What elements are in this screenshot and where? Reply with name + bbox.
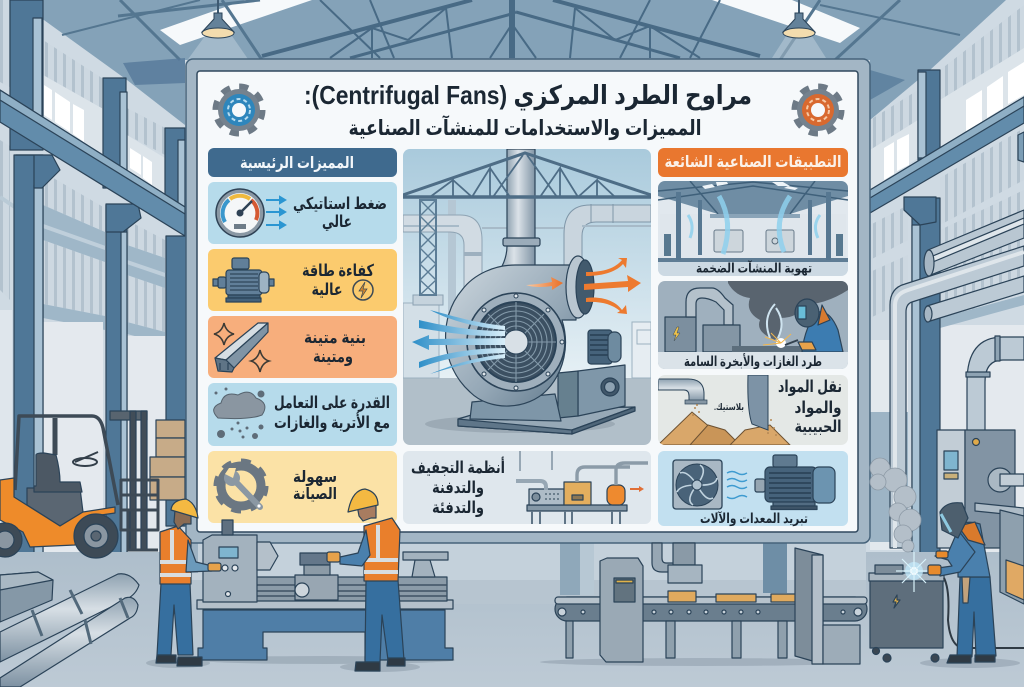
icon: pressure gauge xyxy=(216,189,264,237)
text: high static pressure xyxy=(293,195,387,232)
icon: electric motor xyxy=(755,455,835,510)
inspection machine xyxy=(600,558,643,662)
roof truss xyxy=(262,0,760,58)
legs xyxy=(157,583,193,655)
icon: welding spark xyxy=(896,552,932,592)
card: toxic gas extraction xyxy=(658,281,848,369)
fan base plate xyxy=(458,407,635,434)
lathe headstock xyxy=(203,535,257,602)
text: high energy efficiency xyxy=(302,262,374,299)
exhaust nozzle above conveyor xyxy=(652,543,702,583)
board surface xyxy=(197,71,858,532)
arrows: blue air intake xyxy=(412,310,505,374)
forklift wheels xyxy=(0,523,22,557)
card: high static pressure xyxy=(208,182,397,244)
icon: air swirls xyxy=(688,196,820,254)
ground shadow xyxy=(425,417,615,433)
label: plastic: بلاستيك. xyxy=(714,402,744,412)
caption: تهوية المنشآت الضخمة xyxy=(696,260,812,276)
text: robust structure: ومتينة xyxy=(313,348,353,367)
welding cart xyxy=(869,565,1024,662)
icon: left ceiling lamp xyxy=(186,0,250,62)
lathe machine xyxy=(197,520,453,660)
ceiling xyxy=(37,0,1006,125)
scene: smoke xyxy=(728,281,848,340)
lathe bed xyxy=(250,577,447,601)
card: robust structure xyxy=(208,316,397,378)
icon: axial fan xyxy=(673,460,722,509)
panel: common industrial applications xyxy=(658,148,848,526)
main display board xyxy=(186,59,870,543)
scanning arch xyxy=(795,548,860,664)
heading: key advantages: المميزات الرئيسية xyxy=(240,155,354,172)
board supports under the display xyxy=(188,543,787,595)
card: ease of maintenance xyxy=(208,451,397,523)
right wall bays xyxy=(870,5,1024,555)
card: cooling equipment and machines xyxy=(658,451,848,526)
icon: drying equipment xyxy=(516,451,648,524)
stacked cardboard boxes xyxy=(150,420,185,500)
icon: welder xyxy=(785,299,843,352)
orange vest xyxy=(160,526,191,584)
fan legs xyxy=(470,394,561,421)
arrow: orange inner arrow xyxy=(526,277,563,290)
head xyxy=(174,510,191,529)
smoke plume xyxy=(870,458,921,552)
boots xyxy=(156,655,202,666)
steel stack and pipes xyxy=(0,572,139,687)
conveyor belt xyxy=(555,597,867,658)
caption: تبريد المعدات والآلات xyxy=(700,511,808,526)
panel: drying and heating systems xyxy=(403,451,651,524)
text: high energy efficiency: عالية xyxy=(312,281,342,299)
card: conveying granular materials xyxy=(658,375,848,445)
panel: key advantages xyxy=(208,148,397,523)
forklift body xyxy=(0,478,115,547)
icon: electric motor xyxy=(213,258,274,302)
text: drying and heating systems: والتدفئة xyxy=(432,499,484,518)
icon: title gear right xyxy=(795,87,841,133)
icon: right ceiling lamp xyxy=(772,0,826,58)
conveyor products xyxy=(668,591,809,602)
legs xyxy=(365,580,404,662)
text: drying and heating systems xyxy=(411,457,505,518)
heading: common industrial applications: التطبيقات الصناعية الشائعة xyxy=(664,154,842,171)
forklift xyxy=(0,411,158,558)
lathe carriage xyxy=(295,575,338,600)
title: مراوح الطرد المركزي (Centrifugal Fans): xyxy=(304,80,752,111)
icon: title gear left xyxy=(216,87,262,133)
text: dust and gas handling xyxy=(274,394,390,433)
process machine right xyxy=(937,430,1024,548)
drive motor xyxy=(588,330,621,364)
roof truss xyxy=(403,153,651,197)
forklift mast xyxy=(110,411,147,420)
workbench right xyxy=(975,503,1024,604)
text: dust and gas handling: القدرة على التعامل xyxy=(274,394,390,412)
text: ease of maintenance: الصيانة xyxy=(293,486,337,503)
forklift cab interior xyxy=(27,488,83,526)
orange vest xyxy=(364,518,400,581)
floor shadows xyxy=(146,656,1020,672)
fan volute housing xyxy=(446,265,576,406)
subtitle: المميزات والاستخدامات للمنشآت الصناعية xyxy=(348,115,702,140)
card: ventilation of large facilities xyxy=(658,181,848,276)
card: high energy efficiency xyxy=(208,249,397,311)
lathe stand xyxy=(198,610,453,660)
text: dust and gas handling: مع الأترية والغازات xyxy=(274,412,390,433)
text: drying and heating systems: والتدفنة xyxy=(432,479,484,498)
worker: welder xyxy=(928,503,996,663)
head xyxy=(357,505,376,521)
vertical duct xyxy=(500,149,540,270)
text: conveying granular materials xyxy=(778,378,842,436)
table and sparks xyxy=(732,333,802,352)
text: high energy efficiency: كفاءة طاقة xyxy=(302,262,374,280)
text: drying and heating systems: أنظمة التجفيف xyxy=(411,457,505,477)
board frame xyxy=(186,59,870,543)
background plant and pipes xyxy=(403,200,651,378)
icon: gear and wrench xyxy=(216,461,266,511)
boots xyxy=(355,658,405,671)
icon: air waves xyxy=(727,472,747,498)
arm xyxy=(186,540,212,572)
motor pedestal xyxy=(558,365,625,418)
inlet ring and grille xyxy=(467,293,565,391)
floor xyxy=(0,552,1024,687)
pipes right xyxy=(890,210,1024,548)
icon: sparkle stars xyxy=(214,323,269,372)
forklift cage xyxy=(15,416,118,505)
forklift seat xyxy=(34,453,82,492)
text: high static pressure: ضغط استاتيكي xyxy=(293,195,387,214)
text: conveying granular materials: الحبيبية xyxy=(794,418,842,436)
icon: dust cloud xyxy=(214,388,265,439)
heading: common industrial applications xyxy=(658,148,848,177)
scene: factory hall xyxy=(658,181,848,262)
scene: exhaust duct xyxy=(665,288,740,352)
text: ease of maintenance xyxy=(293,469,337,503)
text: robust structure xyxy=(304,329,366,367)
text: ease of maintenance: سهولة xyxy=(293,469,337,486)
arm xyxy=(340,530,370,566)
worker: operator right xyxy=(327,489,405,671)
panel: centrifugal fan illustration xyxy=(403,149,651,445)
icon: energy bolt xyxy=(353,280,373,300)
worker: operator left xyxy=(156,499,221,666)
text: conveying granular materials: والمواد xyxy=(794,399,842,418)
left columns and beam xyxy=(0,0,186,555)
text: high static pressure: عالي xyxy=(322,213,352,232)
outlet flange xyxy=(566,256,594,318)
caption: طرد الغازات والأبخرة السامة xyxy=(684,353,822,369)
right columns and beam xyxy=(870,70,1024,558)
icon: pressure arrows xyxy=(266,197,285,228)
card: dust and gas handling xyxy=(208,383,397,446)
heading: key advantages xyxy=(208,148,397,177)
lattice tower xyxy=(420,200,436,295)
lathe tailstock xyxy=(412,560,435,577)
left wall bays xyxy=(0,0,171,552)
text: robust structure: بنية متينة xyxy=(304,329,366,347)
arrows: orange discharge xyxy=(584,258,641,314)
text: conveying granular materials: نقل المواد xyxy=(778,378,842,397)
icon: steel I-beam xyxy=(215,323,268,372)
icon: pipe elbow and sand piles xyxy=(658,375,790,445)
